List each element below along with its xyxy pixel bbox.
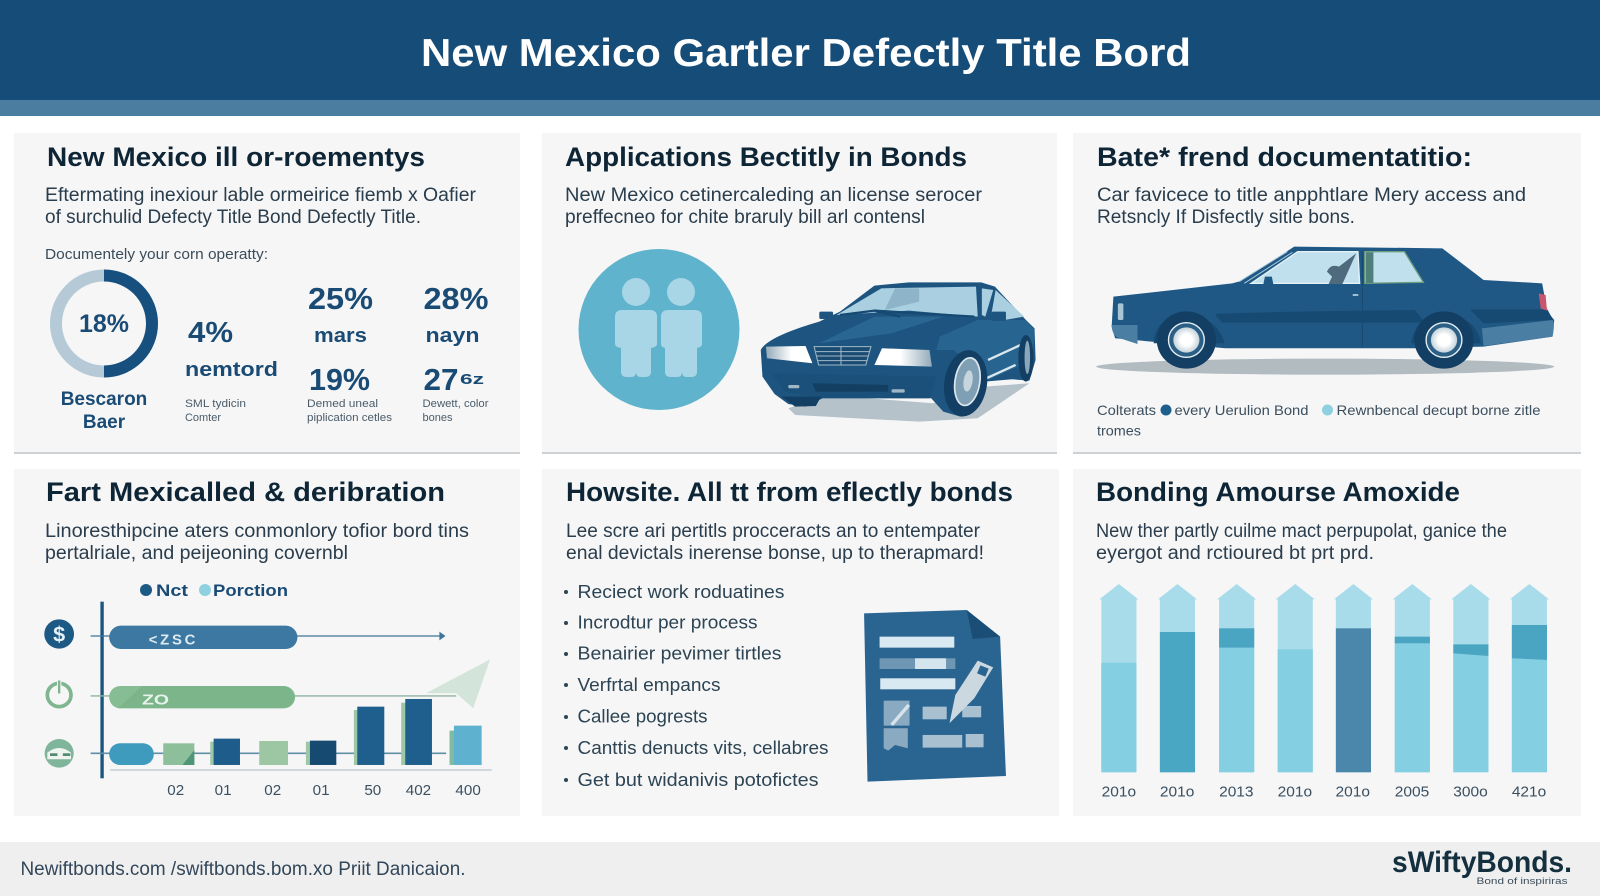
icon: power ring bbox=[47, 680, 71, 707]
stat: 19%: piplication cetles bbox=[307, 412, 393, 424]
donut chart: 18% bbox=[56, 276, 152, 372]
icon: paper plane bbox=[426, 659, 490, 708]
heading: Applications Bectitly in Bonds bbox=[565, 142, 967, 172]
axis labels: 01 bbox=[313, 782, 330, 799]
legend: every Uerulion Bond bbox=[1174, 402, 1308, 418]
panel: bonding amounts bars bbox=[1073, 469, 1581, 816]
panel: how it works checklist bbox=[542, 469, 1059, 816]
description: New Mexico cetinercaleding an license serocer bbox=[565, 185, 983, 206]
stat: 28% bbox=[424, 281, 488, 347]
stat: 25%: 25% bbox=[308, 281, 373, 316]
bars: bottom row bbox=[109, 699, 482, 765]
description: New ther partly cuilme mact perpupolat, ganice the bbox=[1096, 521, 1507, 542]
subheading: Documentely your corn operatty: bbox=[45, 246, 268, 263]
year labels: 201o bbox=[1102, 784, 1136, 801]
bullet list: Verfrtal empancs bbox=[578, 674, 720, 695]
panel: documentation bbox=[1073, 133, 1581, 454]
stat: 27%: 6z bbox=[460, 371, 484, 388]
logo: sWiftyBonds. bbox=[1392, 846, 1572, 879]
stat: 27%: Dewett, color bbox=[422, 398, 489, 410]
description: Linoresthipcine aters conmonlory tofior bord tins bbox=[45, 521, 469, 542]
year labels: 300o bbox=[1453, 784, 1488, 801]
bar 1 bbox=[1099, 584, 1139, 772]
stat: 27%: bones bbox=[422, 412, 453, 424]
bar: middle bbox=[109, 686, 295, 708]
axis labels: 02 bbox=[264, 782, 281, 799]
stat: 19%: Demed uneal bbox=[307, 398, 378, 410]
icon: document with pen bbox=[864, 610, 1006, 782]
stat: 25% bbox=[308, 281, 373, 347]
axis labels: 02 bbox=[167, 782, 184, 799]
year labels: 2013 bbox=[1219, 784, 1254, 801]
heading: Howsite. All tt from eflectly bonds bbox=[566, 477, 1013, 507]
heading: Fart Mexicalled & deribration bbox=[46, 477, 445, 507]
illustration: blue car side view bbox=[1096, 247, 1554, 375]
year labels: 421o bbox=[1512, 784, 1546, 801]
bar 5 bbox=[1334, 584, 1373, 772]
icon: dollar: $ bbox=[53, 623, 65, 647]
bullet list: Get but widanivis potofictes bbox=[578, 769, 818, 790]
description bbox=[565, 185, 983, 228]
stat: 4%: nemtord bbox=[185, 359, 278, 381]
stat: 28%: nayn bbox=[426, 325, 480, 347]
bar 6 bbox=[1393, 584, 1432, 772]
chart legend: Porction bbox=[213, 581, 288, 600]
bar 7 bbox=[1451, 584, 1490, 772]
description: enal devictals inerense bonse, up to therapmard! bbox=[566, 543, 984, 564]
bullet list: Benairier pevimer tirtles bbox=[578, 642, 782, 664]
axis labels: 01 bbox=[215, 782, 232, 799]
arrow bar chart bbox=[1099, 584, 1549, 801]
stat: 27%: 27 bbox=[424, 362, 458, 397]
bullet list bbox=[564, 581, 828, 790]
stat: 19%: 19% bbox=[309, 362, 370, 397]
panel: applications bbox=[542, 133, 1057, 454]
mixed bar chart bbox=[44, 602, 492, 799]
year labels: 201o bbox=[1335, 784, 1370, 801]
stat: 19% bbox=[307, 362, 393, 424]
axis labels bbox=[167, 782, 481, 799]
chart legend: Nct bbox=[156, 581, 188, 600]
bar: top bbox=[109, 626, 297, 649]
axis labels: 402 bbox=[406, 782, 431, 799]
bullet list: Incrodtur per process bbox=[578, 612, 758, 632]
description bbox=[1096, 521, 1507, 564]
stat: 4% bbox=[185, 317, 278, 424]
icon: two people in circle bbox=[578, 249, 740, 410]
panel: requirements and stats bbox=[14, 133, 520, 454]
header banner bbox=[0, 0, 1600, 116]
illustration: blue car front view bbox=[761, 282, 1036, 422]
axis labels: 50 bbox=[364, 782, 381, 799]
description: Retsncly If Disfectly sitle bons. bbox=[1097, 207, 1355, 228]
footer source text: Newiftbonds.com /swiftbonds.bom.xo Priit Danicaion. bbox=[20, 859, 466, 880]
bar: middle: ZO bbox=[142, 692, 169, 708]
donut label bbox=[61, 389, 147, 433]
axis labels: 400 bbox=[455, 782, 481, 799]
description bbox=[45, 521, 469, 564]
year labels bbox=[1102, 784, 1546, 801]
bar 8 bbox=[1510, 584, 1549, 772]
description bbox=[45, 185, 477, 228]
title: New Mexico Gartler Defectly Title Bord bbox=[421, 32, 1191, 75]
legend: tromes bbox=[1097, 422, 1141, 438]
stat: 28%: 28% bbox=[424, 281, 488, 316]
heading: Bonding Amourse Amoxide bbox=[1096, 477, 1460, 507]
stat: 4%: SML tydicin bbox=[185, 398, 246, 410]
footer bbox=[0, 842, 1600, 896]
description: preffecneo for chite braruly bill arl contensl bbox=[565, 207, 925, 228]
description: eyergot and rctioured bt prt prd. bbox=[1096, 543, 1374, 564]
donut label: Bescaron bbox=[61, 389, 147, 410]
bullet list: Canttis denucts vits, cellabres bbox=[578, 737, 828, 758]
description: Eftermating inexiour lable ormeirice fiemb x Oafier bbox=[45, 185, 477, 206]
stat: 4%: Comter bbox=[185, 412, 221, 424]
bullet list: Callee pogrests bbox=[578, 706, 708, 726]
year labels: 201o bbox=[1160, 784, 1194, 801]
bar 2 bbox=[1158, 584, 1197, 772]
logo: Bond of inspiriras bbox=[1476, 876, 1568, 886]
legend: Rewnbencal decupt borne zitle bbox=[1336, 402, 1541, 418]
heading: Bate* frend documentatitio: bbox=[1097, 142, 1472, 172]
description: Car favicece to title anpphtlare Mery access and bbox=[1097, 185, 1526, 206]
donut chart: 18%: 18% bbox=[79, 310, 129, 338]
bar 3 bbox=[1217, 584, 1256, 772]
heading: New Mexico ill or-roementys bbox=[47, 142, 425, 172]
chart legend bbox=[140, 581, 288, 600]
stat: 27% bbox=[422, 362, 489, 424]
year labels: 201o bbox=[1278, 784, 1312, 801]
description: of surchulid Defecty Title Bond Defectly Title. bbox=[45, 207, 421, 228]
bar 4 bbox=[1276, 584, 1315, 772]
description: pertalriale, and peijeoning covernbl bbox=[45, 543, 348, 564]
year labels: 2005 bbox=[1395, 784, 1429, 801]
legend bbox=[1097, 402, 1541, 438]
description: Lee scre ari pertitls procceracts an to entempater bbox=[566, 521, 981, 542]
icon: dollar bbox=[44, 619, 74, 649]
stat: 25%: mars bbox=[314, 325, 367, 347]
legend: Colterats bbox=[1097, 402, 1156, 418]
description bbox=[566, 521, 984, 564]
description bbox=[1097, 185, 1526, 228]
stat: 4%: 4% bbox=[188, 317, 233, 349]
bar: top: <ZSC bbox=[149, 632, 196, 648]
panel: distribution chart bbox=[14, 469, 520, 816]
bullet list: Reciect work roduatines bbox=[578, 581, 784, 602]
donut label: Baer bbox=[83, 412, 126, 433]
icon: face bbox=[45, 739, 74, 768]
